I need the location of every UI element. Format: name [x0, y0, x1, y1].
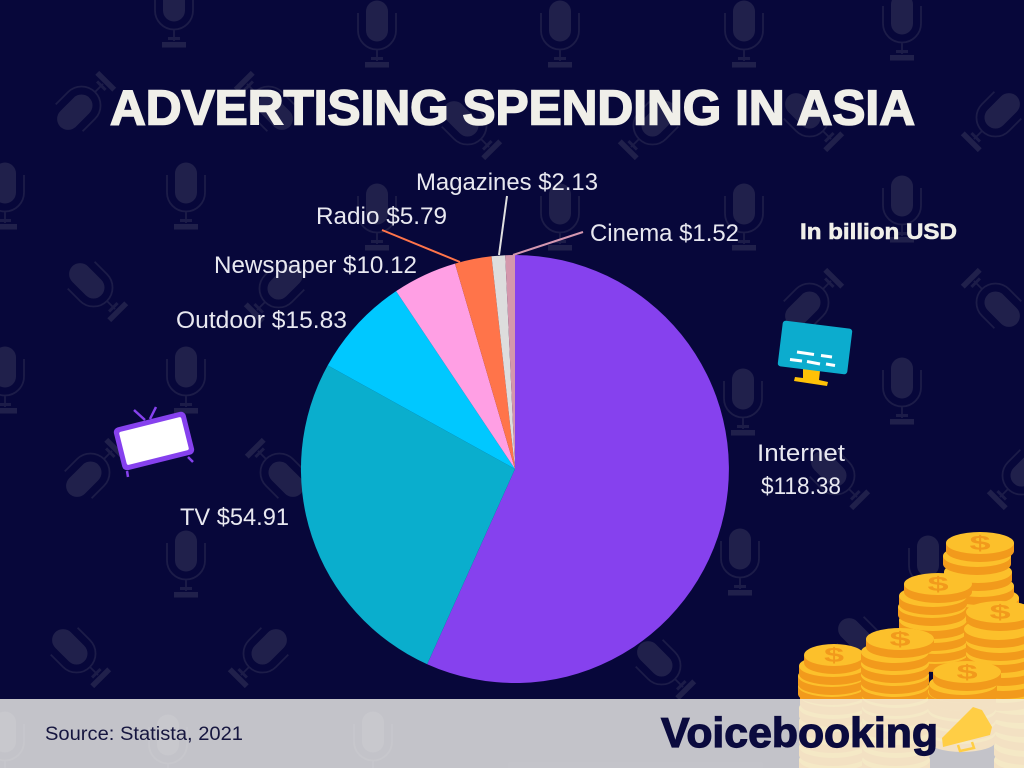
icon: stacks of gold coins: $ — [969, 533, 991, 555]
icon: television — [113, 407, 195, 477]
slice: Magazines — [492, 255, 515, 469]
source note: Source: Statista, 2021 — [45, 724, 243, 745]
label: Newspaper: Newspaper $10.12 — [214, 252, 417, 279]
icon: stacks of gold coins: $ — [889, 629, 911, 651]
logo: Voicebooking: Voicebooking — [661, 709, 938, 756]
slice: Internet — [427, 255, 729, 683]
leader line: Radio — [382, 230, 460, 262]
slice: TV — [301, 365, 515, 664]
title: ADVERTISING SPENDING IN ASIA — [110, 82, 915, 136]
label: Magazines: Magazines $2.13 — [416, 169, 598, 196]
icon: stacks of gold coins — [798, 532, 1024, 768]
leader line: Magazines — [499, 196, 507, 255]
pie chart — [301, 255, 729, 683]
icon: stacks of gold coins: $ — [956, 662, 978, 684]
slice: Outdoor — [328, 291, 515, 469]
unit note: In billion USD — [800, 219, 957, 244]
icon: stacks of gold coins: $ — [824, 645, 844, 667]
label: Internet: $118.38 — [761, 473, 841, 500]
icon: stacks of gold coins: $ — [927, 574, 949, 596]
slice: Newspaper — [396, 264, 515, 469]
label: TV: TV $54.91 — [180, 504, 289, 531]
icon: desktop monitor — [777, 320, 853, 386]
icon: stacks of gold coins: $ — [989, 602, 1011, 624]
label: Cinema: Cinema $1.52 — [590, 220, 739, 247]
slice: Cinema — [505, 255, 515, 469]
footer band — [0, 699, 1024, 768]
label: Outdoor: Outdoor $15.83 — [176, 307, 347, 334]
slice: Radio — [455, 256, 515, 469]
icon: megaphone — [942, 707, 992, 751]
leader line: Cinema — [513, 232, 583, 255]
label: Internet — [757, 440, 845, 500]
label: Radio: Radio $5.79 — [316, 203, 447, 230]
label: Internet: Internet — [757, 440, 845, 467]
